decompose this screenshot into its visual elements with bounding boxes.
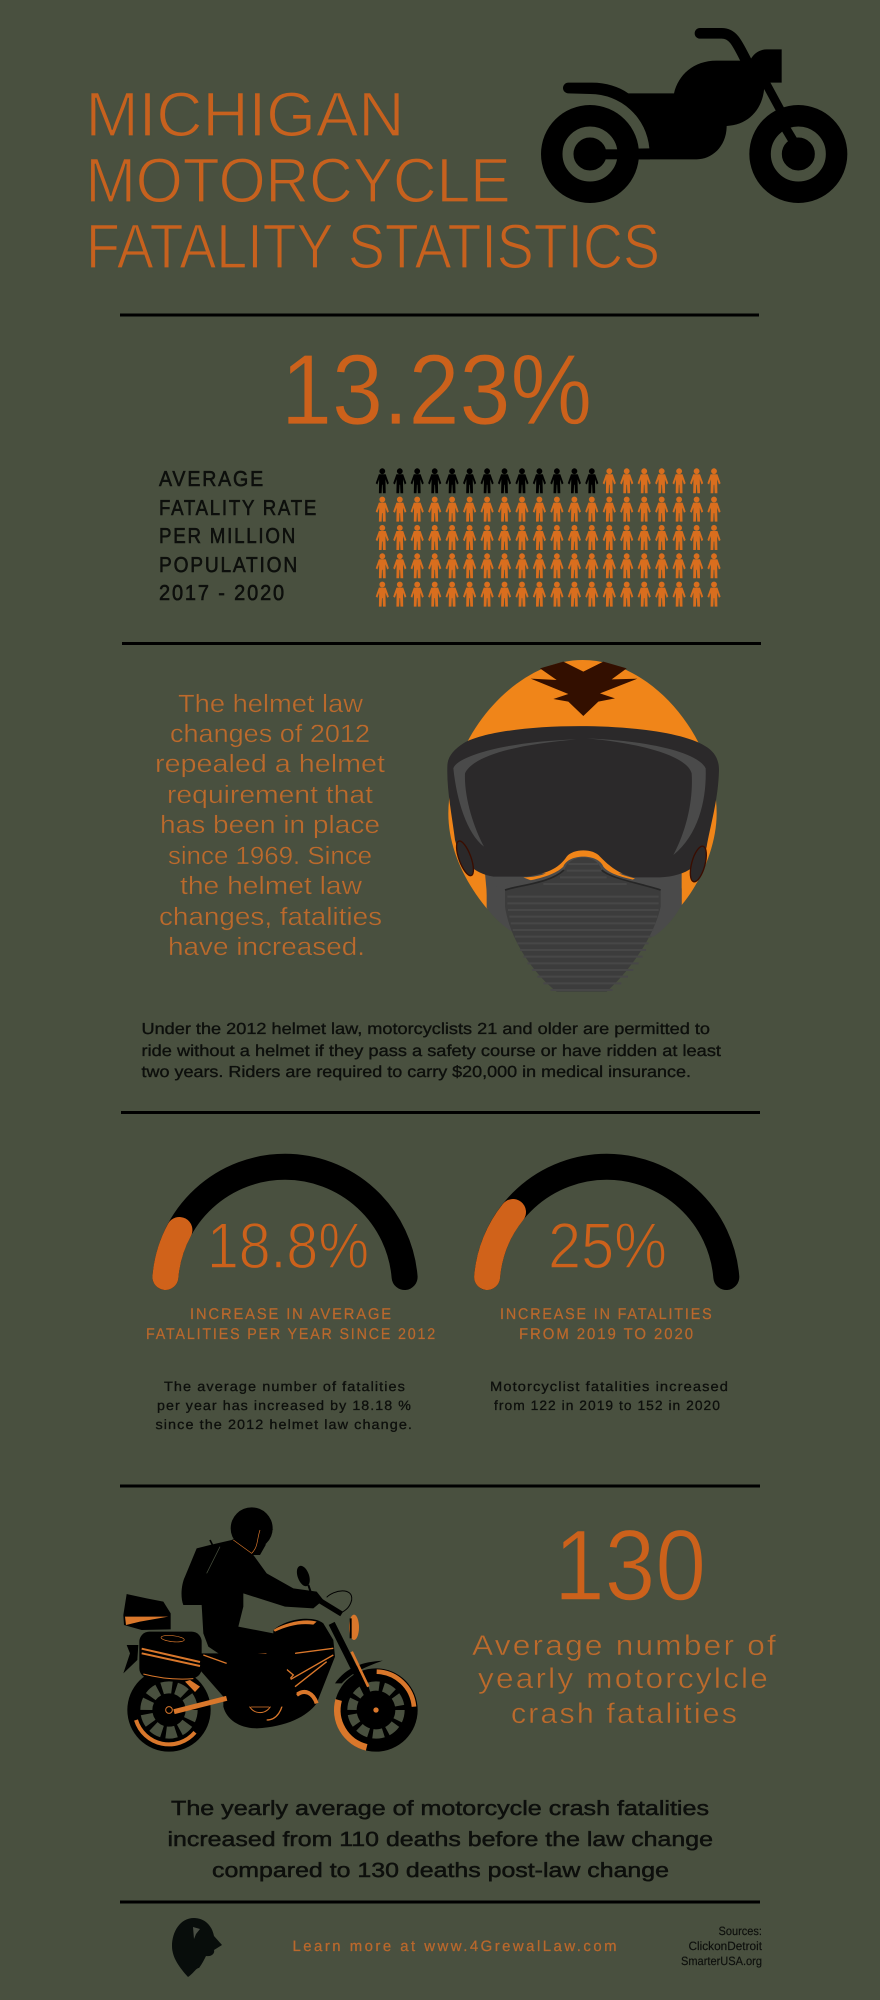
- helmet law text: changes, fatalities: [159, 903, 382, 931]
- divider: [122, 642, 761, 645]
- yearly average text: [168, 1797, 713, 1882]
- sources: Sources:: [718, 1924, 762, 1938]
- helmet law paragraph: Under the 2012 helmet law, motorcyclists 21 and older are permitted to: [142, 1021, 710, 1038]
- panel: gauge 18.8%: The average number of fatalities: [164, 1379, 406, 1394]
- helmet law paragraph: ride without a helmet if they pass a safety course or have ridden at least: [142, 1043, 722, 1060]
- panel: gauge 18.8%: INCREASE IN AVERAGE: [190, 1306, 393, 1323]
- panel: gauge 18.8%: 18.8%: [207, 1209, 369, 1282]
- divider: [121, 1111, 760, 1114]
- panel: gauge 18.8%: [146, 1167, 437, 1432]
- panel: gauge 25%: Motorcyclist fatalities increased: [490, 1379, 729, 1394]
- helmet law text: has been in place: [160, 811, 380, 839]
- title: MICHIGAN: [86, 80, 404, 150]
- stat caption: Average number of: [472, 1630, 778, 1662]
- helmet law paragraph: [142, 1021, 722, 1081]
- fatality rate label: PER MILLION: [159, 524, 297, 548]
- yearly average text: The yearly average of motorcycle crash fatalities: [171, 1797, 709, 1820]
- fatality rate label: POPULATION: [159, 553, 299, 577]
- fatality rate label: 2017 - 2020: [159, 581, 286, 605]
- helmet law paragraph: two years. Riders are required to carry $20,000 in medical insurance.: [142, 1064, 691, 1081]
- helmet law text: the helmet law: [180, 872, 363, 900]
- title: FATALITY STATISTICS: [86, 212, 660, 282]
- title: MOTORCYCLE: [86, 146, 510, 216]
- yearly average text: increased from 110 deaths before the law change: [168, 1828, 713, 1851]
- helmet law text: requirement that: [167, 781, 373, 809]
- call to action: Learn more at www.4GrewalLaw.com: [292, 1938, 619, 1955]
- icon: motorcycle: [541, 33, 847, 203]
- helmet law text: changes of 2012: [170, 720, 370, 748]
- helmet law text: repealed a helmet: [155, 750, 385, 778]
- fatality rate label: FATALITY RATE: [159, 496, 318, 520]
- fatality rate label: [159, 467, 318, 605]
- panel: gauge 25%: from 122 in 2019 to 152 in 2020: [494, 1398, 721, 1413]
- divider: [120, 1484, 760, 1488]
- icon: motorcycle rider: [123, 1507, 418, 1752]
- panel: gauge 25%: [487, 1167, 729, 1413]
- panel: gauge 18.8%: per year has increased by 18.18 %: [157, 1398, 412, 1413]
- fatality rate label: AVERAGE: [159, 467, 265, 491]
- helmet law text: [155, 690, 385, 961]
- sources: SmarterUSA.org: [681, 1954, 762, 1968]
- stat caption: [472, 1630, 778, 1730]
- helmet law text: have increased.: [168, 933, 365, 961]
- panel: gauge 25%: 25%: [548, 1209, 667, 1282]
- sources: [681, 1924, 763, 1968]
- divider: [120, 1900, 760, 1904]
- sources: ClickonDetroit: [688, 1939, 763, 1953]
- panel: gauge 25%: FROM 2019 TO 2020: [519, 1326, 695, 1343]
- helmet law text: The helmet law: [178, 690, 364, 718]
- divider: [120, 314, 759, 316]
- helmet law text: since 1969. Since: [168, 842, 372, 870]
- big stat: 13.23%: 13.23%: [281, 334, 592, 446]
- title: [86, 80, 660, 282]
- icon: helmet: [447, 660, 719, 992]
- stat caption: crash fatalities: [511, 1698, 739, 1730]
- panel: gauge 18.8%: since the 2012 helmet law change.: [156, 1417, 413, 1432]
- chart: people pictogram: [376, 468, 721, 607]
- yearly average text: compared to 130 deaths post-law change: [212, 1859, 669, 1882]
- panel: gauge 25%: INCREASE IN FATALITIES: [500, 1306, 714, 1323]
- panel: gauge 18.8%: FATALITIES PER YEAR SINCE 2012: [146, 1326, 437, 1343]
- stat caption: yearly motorcylcle: [478, 1663, 770, 1695]
- icon: lion logo: [172, 1918, 222, 1977]
- big stat: 130: 130: [554, 1510, 706, 1622]
